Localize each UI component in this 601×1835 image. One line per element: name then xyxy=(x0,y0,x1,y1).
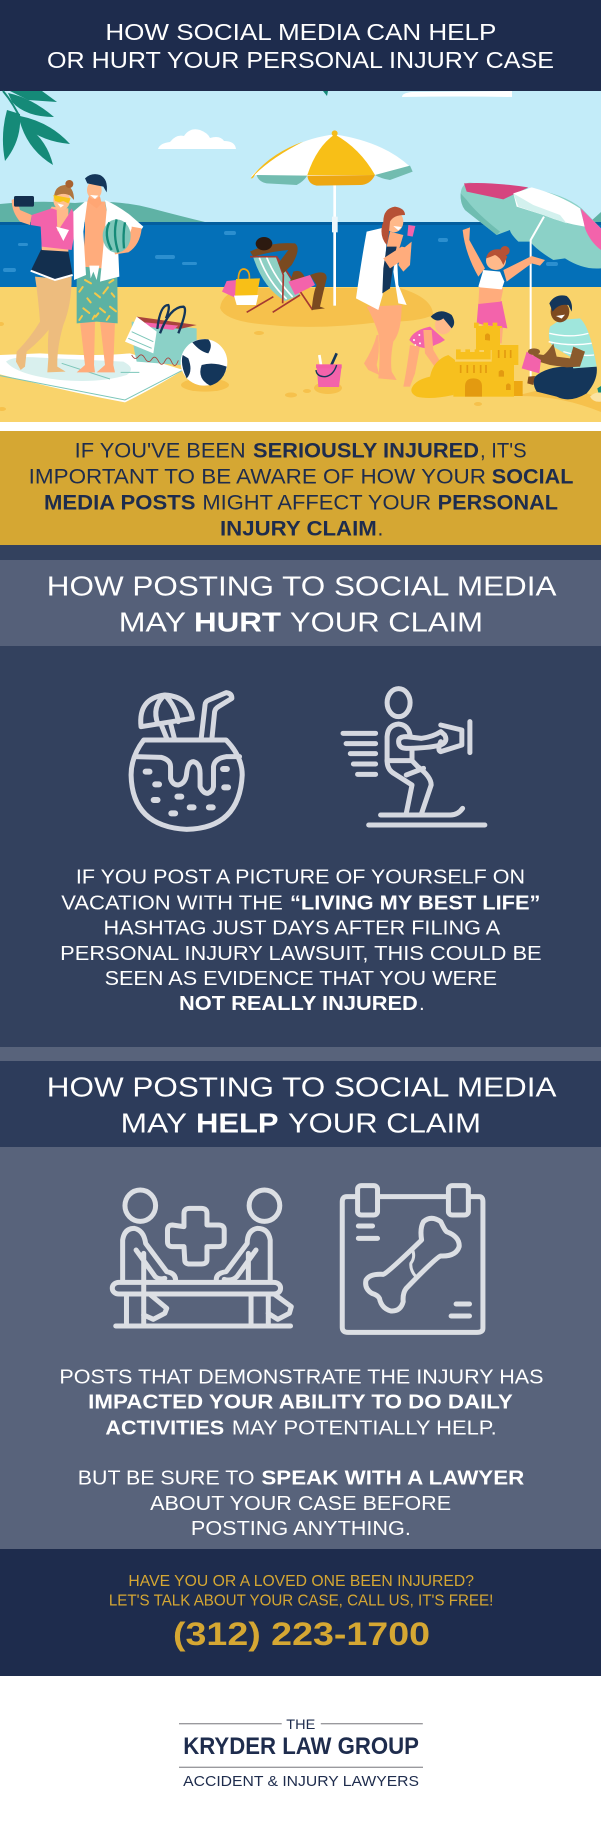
icon: striped beach umbrella, lounger and woman with phone xyxy=(222,130,415,387)
icon: palm leaves xyxy=(3,91,328,165)
text block: hurt explanation: IF YOU POST A PICTURE OF YOURSELF ON xyxy=(76,865,525,888)
text block: intro statement: IF YOU'VE BEEN xyxy=(75,439,246,462)
logo: The Kryder Law Group: ACCIDENT & INJURY LAWYERS xyxy=(183,1773,419,1790)
text block: hurt explanation: SEEN AS EVIDENCE THAT YOU WERE xyxy=(105,967,497,990)
heading: how posting may hurt your claim xyxy=(0,560,601,646)
panel: title banner xyxy=(0,0,601,91)
text block: help explanation: IMPACTED YOUR ABILITY TO DO DAILY xyxy=(88,1391,513,1414)
text block: help explanation: ABOUT YOUR CASE BEFORE xyxy=(150,1492,451,1515)
text block: help explanation xyxy=(59,1365,544,1540)
logo: The Kryder Law Group: THE xyxy=(286,1716,315,1732)
text block: hurt explanation: . xyxy=(419,992,425,1015)
icon: family building sandcastle under teal umbrella xyxy=(403,183,601,402)
title: OR HURT YOUR PERSONAL INJURY CASE xyxy=(47,47,554,73)
text block: intro statement: . xyxy=(378,517,383,540)
logo: The Kryder Law Group: KRYDER LAW GROUP xyxy=(183,1733,419,1760)
heading: how posting may help your claim: MAY xyxy=(121,1108,187,1139)
logo: The Kryder Law Group xyxy=(179,1716,423,1790)
text block: intro statement: IMPORTANT TO BE AWARE OF HOW YOUR xyxy=(29,465,486,488)
text block: intro statement: SERIOUSLY INJURED xyxy=(253,439,479,462)
text block: help explanation: SPEAK WITH A LAWYER xyxy=(261,1467,524,1490)
panel: beach illustration xyxy=(0,91,601,422)
panel: call to action xyxy=(0,1549,601,1676)
text block: call to action: LET'S TALK ABOUT YOUR CASE, CALL US, IT'S FREE! xyxy=(109,1592,493,1609)
icon: two people at a table with medical cross xyxy=(112,1190,291,1326)
text block: help explanation: POSTS THAT DEMONSTRATE THE INJURY HAS xyxy=(59,1365,544,1388)
heading: how posting may hurt your claim: YOUR CLAIM xyxy=(290,607,483,638)
text block: hurt explanation: VACATION WITH THE xyxy=(61,891,283,914)
text block: hurt explanation xyxy=(60,865,542,1015)
icon: coconut drink with umbrella xyxy=(131,693,242,829)
heading: how posting may help your claim: YOUR CLAIM xyxy=(288,1108,481,1139)
text block: intro statement: MIGHT AFFECT YOUR xyxy=(202,491,431,514)
panel: intro gold banner xyxy=(0,431,601,545)
phone number: (312) 223-1700 xyxy=(173,1616,430,1652)
panel: white separator xyxy=(0,422,601,431)
icon: water skier xyxy=(343,689,485,825)
text block: hurt explanation: PERSONAL INJURY LAWSUIT, THIS COULD BE xyxy=(60,942,542,965)
text block: intro statement: INJURY CLAIM xyxy=(220,517,377,540)
title: HOW SOCIAL MEDIA CAN HELP xyxy=(105,19,496,45)
panel: hurt section xyxy=(0,545,601,1047)
icon: x-ray clipboard with broken bone xyxy=(342,1186,483,1332)
icon: clouds xyxy=(158,91,512,149)
text block: help explanation: ACTIVITIES xyxy=(105,1417,224,1440)
text block: call to action xyxy=(109,1573,493,1609)
text block: intro statement: PERSONAL xyxy=(438,491,558,514)
text block: help explanation: MAY POTENTIALLY HELP. xyxy=(232,1417,497,1440)
text block: call to action: HAVE YOU OR A LOVED ONE BEEN INJURED? xyxy=(128,1573,474,1590)
heading: how posting may help your claim xyxy=(0,1061,601,1147)
heading: how posting may help your claim: HELP xyxy=(196,1108,279,1139)
heading: how posting may hurt your claim: MAY xyxy=(119,607,186,638)
text block: hurt explanation: NOT REALLY INJURED xyxy=(179,992,418,1015)
text block: help explanation: POSTING ANYTHING. xyxy=(191,1517,411,1540)
heading: how posting may hurt your claim: HURT xyxy=(194,607,281,638)
text block: hurt explanation: “LIVING MY BEST LIFE” xyxy=(290,891,540,914)
text block: intro statement: , IT'S xyxy=(480,439,527,462)
panel: help section xyxy=(0,1047,601,1549)
text block: hurt explanation: HASHTAG JUST DAYS AFTER FILING A xyxy=(104,917,501,940)
heading: how posting may hurt your claim: HOW POSTING TO SOCIAL MEDIA xyxy=(47,570,557,601)
text block: intro statement xyxy=(29,439,574,540)
icon: couple taking selfie with towel and beach bag xyxy=(0,174,229,402)
heading: how posting may help your claim: HOW POSTING TO SOCIAL MEDIA xyxy=(47,1072,557,1103)
text block: intro statement: SOCIAL xyxy=(492,465,574,488)
text block: help explanation: BUT BE SURE TO xyxy=(78,1467,254,1490)
text block: intro statement: MEDIA POSTS xyxy=(44,491,196,514)
title xyxy=(47,19,554,73)
